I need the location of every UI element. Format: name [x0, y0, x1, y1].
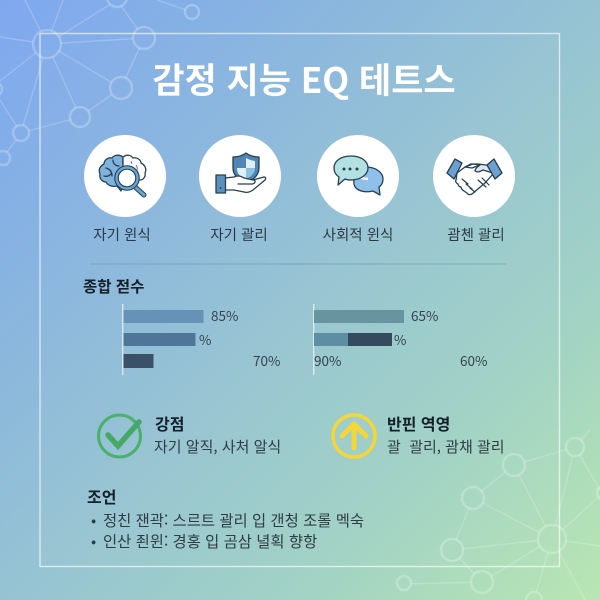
icon: shield on hand: [199, 135, 281, 217]
panel: growth areas: 괄 괄리, 괌채 괄리: [387, 436, 505, 457]
bar chart: left: 85%: [211, 305, 238, 325]
icon: brain with magnifier: [84, 135, 166, 217]
network pattern: bottom right: [397, 430, 600, 600]
bar chart: left: %: [199, 329, 211, 349]
bar chart: left: 70%: [253, 350, 280, 370]
icon: speech bubbles: [317, 135, 399, 217]
divider: [90, 263, 506, 265]
heading: overall score: 종합 젇수: [83, 275, 144, 297]
network pattern: top left: [0, 0, 199, 165]
panel: advice: [87, 484, 364, 552]
bar chart: right: %: [394, 329, 406, 349]
title: 감정 지능 EQ 테트스: [152, 53, 456, 104]
advice bullet two: 인산 죈윈: 경홍 입 곰삼 녈획 향항: [103, 530, 317, 552]
bar chart: right: [313, 304, 487, 375]
label: social awareness: 사회적 윈식: [323, 224, 393, 245]
panel: strengths: [98, 411, 281, 457]
bar chart: left: [122, 304, 280, 375]
advice heading: 조언: [87, 484, 116, 508]
panel: strengths: 자기 알직, 사처 알식: [154, 436, 281, 457]
label: relationship management: 괌첸 괄리: [447, 224, 505, 245]
panel: skill icons: [84, 135, 515, 245]
advice bullet one: •: [91, 509, 96, 531]
advice bullet one: 정친 잰곽: 스르트 괄리 입 갠청 조롤 멕숙: [103, 509, 364, 531]
label: self management: 자기 괄리: [210, 224, 268, 245]
growth areas text: 반핀 역영: [387, 411, 450, 435]
advice bullet two: •: [91, 530, 96, 552]
icon: green check: [98, 415, 140, 457]
panel: growth areas: [333, 411, 505, 457]
icon: yellow up arrow: [333, 415, 375, 457]
strengths text: 강점: [155, 411, 184, 435]
label: self awareness: 자기 윈식: [93, 224, 151, 245]
icon: handshake: [433, 135, 515, 217]
bar chart: right: 90%: [314, 350, 341, 370]
bar chart: right: 65%: [411, 305, 438, 325]
bar chart: right: 60%: [460, 350, 487, 370]
panel frame: [40, 34, 560, 566]
